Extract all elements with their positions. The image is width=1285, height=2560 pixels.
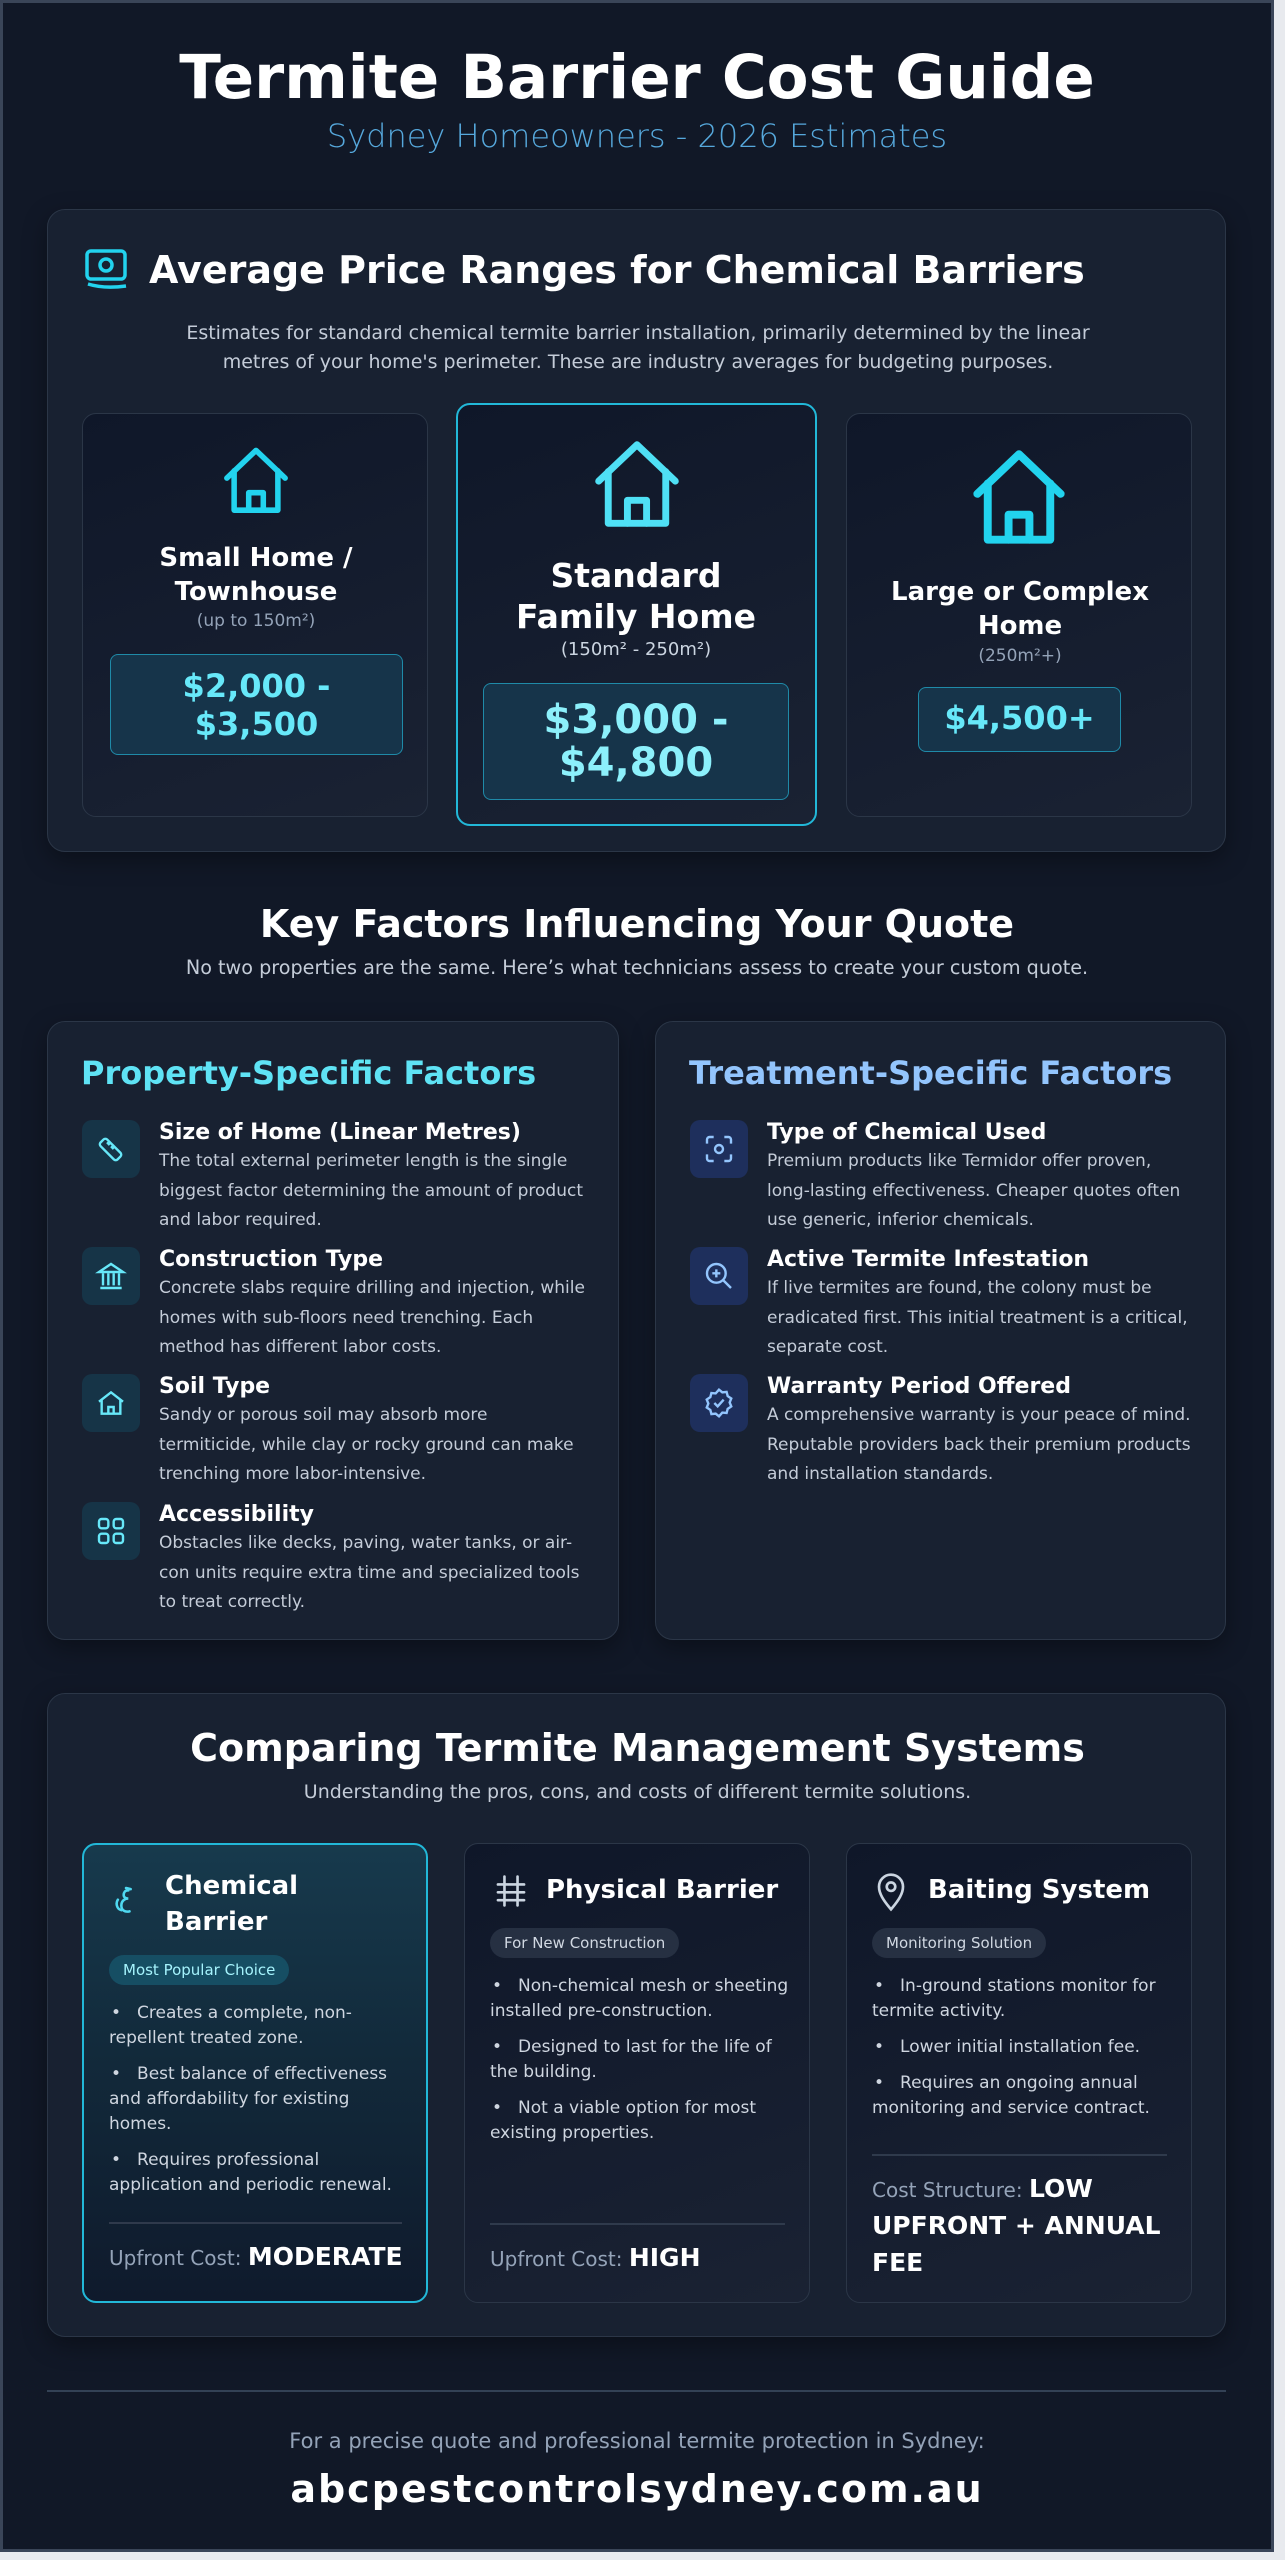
badge <box>872 1928 1046 1958</box>
icon: house <box>224 448 288 513</box>
card title: Small Home / <box>159 543 353 573</box>
bullet list: Creates a complete, non-repellent treated zone. <box>109 2003 352 2048</box>
item: accessibility <box>82 1502 580 1612</box>
badge <box>109 1955 289 1985</box>
size note: (150m² - 250m²) <box>561 639 711 660</box>
price box <box>110 654 403 755</box>
price box: $3,500 <box>195 705 318 743</box>
card title: Baiting System <box>928 1875 1150 1905</box>
item: chemical type <box>690 1120 1180 1230</box>
bullet list: Lower initial installation fee. <box>900 2037 1140 2057</box>
title: Termite Barrier Cost Guide <box>179 42 1095 113</box>
bullet list: Not a viable option for most existing properties. <box>490 2098 756 2143</box>
item: soil: Sandy or porous soil may absorb more termiticide, while clay or rocky ground can make trenching more labor-intensive. <box>159 1405 574 1484</box>
heading: key factors: Key Factors Influencing Your Quote <box>260 902 1014 946</box>
bullet list: Requires professional application and periodic renewal. <box>109 2150 392 2195</box>
icon: mesh <box>496 1875 526 1907</box>
price box: $4,500+ <box>944 699 1095 737</box>
card title: Barrier <box>165 1907 267 1937</box>
subheading: Understanding the pros, cons, and costs of different termite solutions. <box>304 1781 971 1803</box>
price box <box>483 683 789 800</box>
icon: pin <box>878 1873 904 1912</box>
bullet list: Best balance of effectiveness and affordability for existing homes. <box>109 2064 387 2134</box>
icon: building <box>82 1247 140 1305</box>
card title <box>165 1871 298 1937</box>
item: chemical type: Premium products like Termidor offer proven, long-lasting effectiveness. Cheaper quotes often use generic, inferior chemicals. <box>767 1151 1180 1230</box>
item: construction <box>82 1247 585 1357</box>
icon: grid <box>82 1502 140 1560</box>
item: warranty <box>690 1374 1191 1484</box>
icon: zoom <box>690 1247 748 1305</box>
item: size: The total external perimeter length is the single biggest factor determining the amount of product and labor required. <box>159 1151 583 1230</box>
subtitle: Sydney Homeowners - 2026 Estimates <box>327 117 947 155</box>
panel heading: Treatment-Specific Factors <box>689 1054 1172 1092</box>
card title: Family Home <box>516 597 756 636</box>
badge: Most Popular Choice <box>123 1961 275 1979</box>
panel: property-specific factors <box>47 1021 619 1640</box>
card title <box>891 577 1149 641</box>
item: size: Size of Home (Linear Metres) <box>159 1120 521 1145</box>
icon: scan <box>690 1120 748 1178</box>
item: warranty: Warranty Period Offered <box>767 1374 1071 1399</box>
card title: Standard <box>550 556 722 595</box>
card title: Townhouse <box>175 577 337 607</box>
bullet list: Non-chemical mesh or sheeting installed pre-construction. <box>490 1976 788 2021</box>
subheading: No two properties are the same. Here’s what technicians assess to create your custom quote. <box>186 956 1088 979</box>
icon: home <box>82 1374 140 1432</box>
card: standard home <box>456 403 817 826</box>
badge <box>490 1928 679 1958</box>
item: soil <box>82 1374 574 1484</box>
card: physical barrier <box>464 1843 810 2303</box>
item: construction: Concrete slabs require drilling and injection, while homes with sub-floors need trenching. Each method has different labor costs. <box>159 1278 585 1357</box>
item: infestation <box>690 1247 1188 1357</box>
item: infestation: Active Termite Infestation <box>767 1247 1089 1272</box>
item: construction: Construction Type <box>159 1247 383 1272</box>
description <box>186 322 1090 373</box>
card: small home <box>82 413 428 817</box>
bullet list <box>490 1976 788 2143</box>
item: accessibility: Accessibility <box>159 1502 314 1527</box>
bullet list: In-ground stations monitor for termite activity. <box>872 1976 1156 2021</box>
bullet list <box>872 1976 1156 2118</box>
price box: $4,800 <box>559 740 713 786</box>
cost: Cost Structure: LOW UPFRONT + ANNUAL FEE <box>872 2174 1161 2277</box>
bullet list: Requires an ongoing annual monitoring and service contract. <box>872 2073 1150 2118</box>
panel: price ranges <box>47 209 1226 852</box>
bullet list <box>109 2003 392 2195</box>
item: chemical type: Type of Chemical Used <box>767 1120 1046 1145</box>
icon: house <box>973 450 1065 544</box>
card: baiting system <box>846 1843 1192 2303</box>
card title: Large or Complex <box>891 577 1149 607</box>
description: Estimates for standard chemical termite barrier installation, primarily determined by the linear <box>186 322 1090 344</box>
item: soil: Soil Type <box>159 1374 270 1399</box>
size note: (up to 150m²) <box>197 611 315 631</box>
icon: badge check <box>690 1374 748 1432</box>
badge: Monitoring Solution <box>886 1934 1032 1952</box>
icon: money <box>85 249 127 289</box>
icon: chemical <box>115 1886 132 1913</box>
bullet list: Designed to last for the life of the building. <box>490 2037 772 2082</box>
badge: For New Construction <box>504 1934 665 1952</box>
panel: comparing systems <box>47 1693 1226 2337</box>
card: large home <box>846 413 1192 817</box>
card title <box>159 543 353 607</box>
icon: ruler <box>82 1120 140 1178</box>
icon: house <box>595 441 679 527</box>
card: chemical barrier <box>82 1843 428 2303</box>
panel heading: Property-Specific Factors <box>81 1054 536 1092</box>
card title: Home <box>978 611 1062 641</box>
item: warranty: A comprehensive warranty is your peace of mind. Reputable providers back their premium products and installation standards. <box>767 1405 1191 1484</box>
footer text: For a precise quote and professional termite protection in Sydney: <box>289 2429 985 2453</box>
cost: Upfront Cost: HIGH <box>490 2243 700 2272</box>
panel: treatment-specific factors <box>655 1021 1226 1640</box>
cost: Upfront Cost: MODERATE <box>109 2242 403 2271</box>
price box: $2,000 - <box>183 667 330 705</box>
card title <box>516 556 756 636</box>
price box: $3,000 - <box>544 697 728 743</box>
item: size <box>82 1120 583 1230</box>
item: accessibility: Obstacles like decks, paving, water tanks, or air-con units require extra time and specialized tools to treat correctly. <box>159 1533 580 1612</box>
card title: Chemical <box>165 1871 298 1901</box>
heading: Average Price Ranges for Chemical Barriers <box>149 248 1085 292</box>
card title: Physical Barrier <box>546 1875 778 1905</box>
size note: (250m²+) <box>978 646 1062 666</box>
item: infestation: If live termites are found, the colony must be eradicated first. This initial treatment is a critical, separate cost. <box>767 1278 1188 1357</box>
footer url: abcpestcontrolsydney.com.au <box>290 2467 984 2511</box>
description: metres of your home's perimeter. These are industry averages for budgeting purposes. <box>223 351 1053 373</box>
price box <box>918 687 1121 752</box>
heading: Comparing Termite Management Systems <box>190 1726 1085 1770</box>
